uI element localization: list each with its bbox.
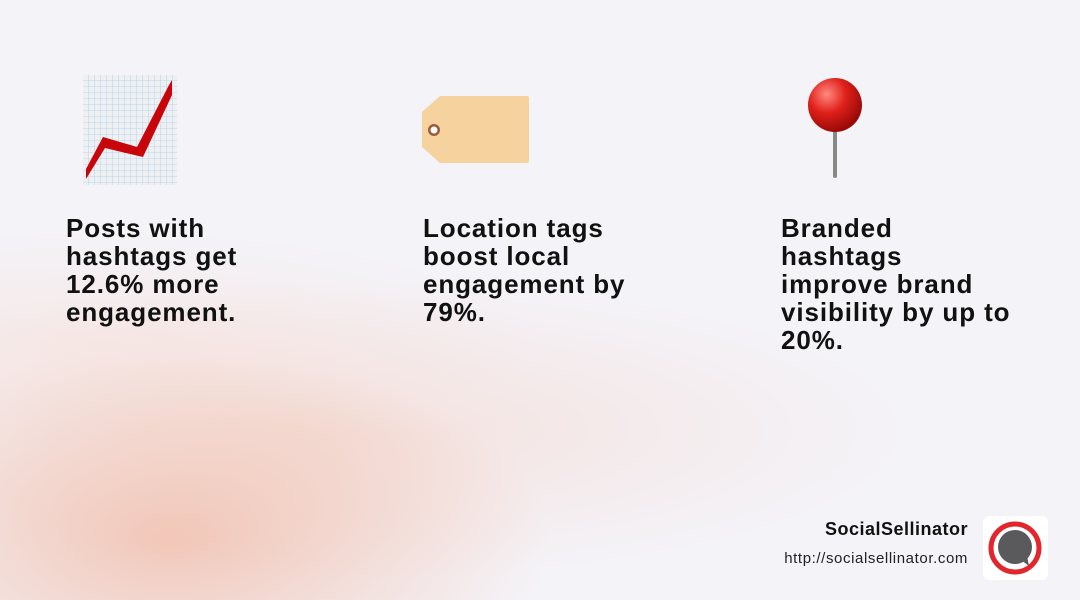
brand name: SocialSellinator bbox=[825, 519, 968, 539]
icon: tag bbox=[422, 96, 529, 163]
text: branded hashtags stat: improve brand bbox=[781, 269, 973, 299]
text: location tags stat: boost local bbox=[423, 241, 570, 271]
text: location tags stat bbox=[423, 213, 625, 327]
text: hashtags stat bbox=[66, 213, 237, 327]
text: branded hashtags stat bbox=[781, 213, 1010, 355]
brand url: http://socialsellinator.com bbox=[784, 550, 968, 567]
text: branded hashtags stat: Branded bbox=[781, 213, 893, 243]
logo bbox=[983, 516, 1048, 580]
text: branded hashtags stat: visibility by up to bbox=[781, 297, 1010, 327]
icon: pushpin bbox=[808, 78, 862, 178]
text: hashtags stat: 12.6% more bbox=[66, 269, 220, 299]
text: location tags stat: engagement by bbox=[423, 269, 625, 299]
text: branded hashtags stat: 20%. bbox=[781, 325, 844, 355]
icon: chart increasing bbox=[83, 75, 177, 185]
text: branded hashtags stat: hashtags bbox=[781, 241, 902, 271]
text: hashtags stat: hashtags get bbox=[66, 241, 237, 271]
text: location tags stat: Location tags bbox=[423, 213, 604, 243]
text: hashtags stat: engagement. bbox=[66, 297, 236, 327]
text: location tags stat: 79%. bbox=[423, 297, 486, 327]
text: hashtags stat: Posts with bbox=[66, 213, 205, 243]
